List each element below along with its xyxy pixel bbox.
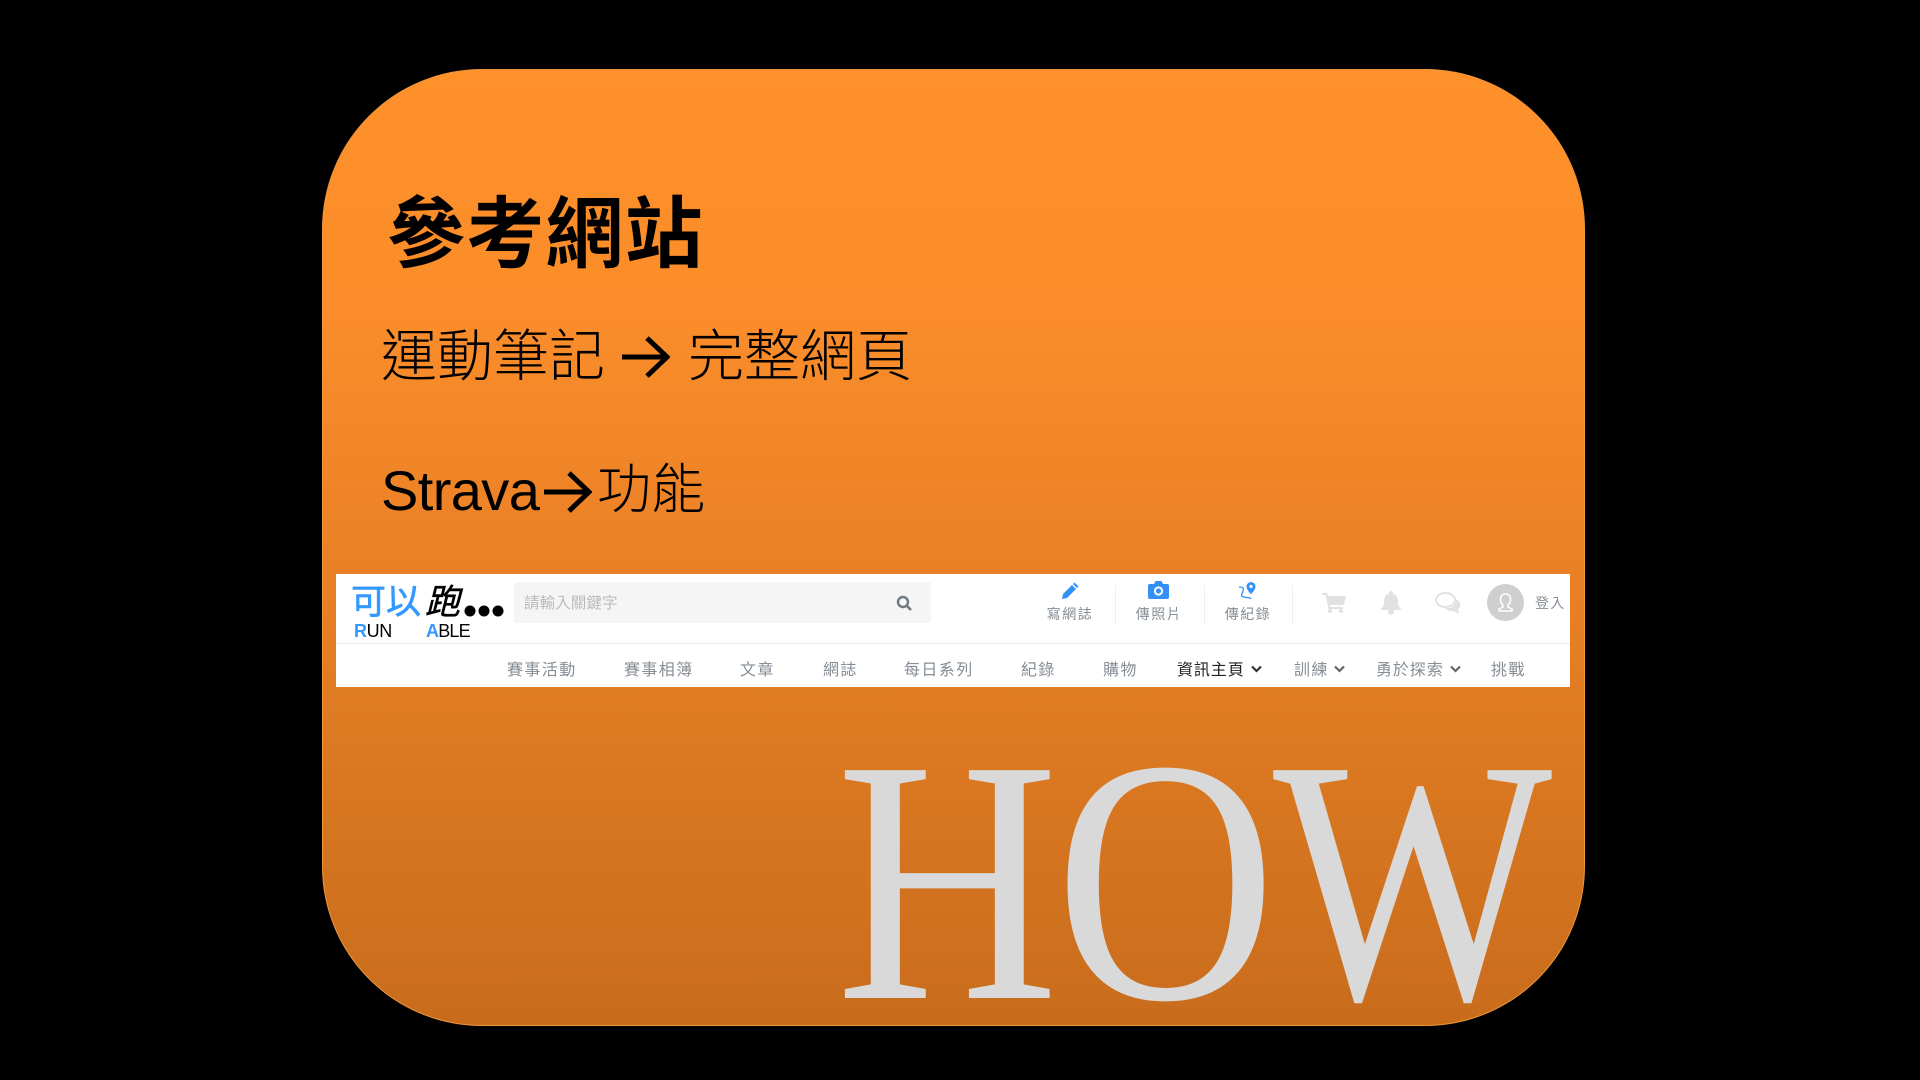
- navigation bar: 紀錄: [1021, 662, 1056, 679]
- logo: Runable: RUN: [354, 621, 392, 641]
- watermark: HOW: O: [1055, 688, 1276, 1073]
- icon: pencil: [1062, 582, 1078, 599]
- label: write log: 寫網誌: [1047, 606, 1093, 622]
- text: sports notes to full web page: 完整網頁: [688, 325, 912, 388]
- navigation bar: 訓練: [1294, 662, 1329, 679]
- divider: [1292, 585, 1293, 625]
- label: log in: 登入: [1535, 595, 1565, 611]
- divider: [1204, 585, 1205, 625]
- watermark: HOW: W: [1273, 688, 1555, 1073]
- icon: avatar: [1487, 584, 1524, 621]
- arrow: right: [622, 336, 670, 378]
- icon: bell: [1380, 591, 1402, 615]
- text: sports notes to full web page: 運動筆記: [381, 325, 605, 388]
- text: Strava to features: 功能: [597, 460, 705, 520]
- navigation bar: 資訊主頁: [1177, 662, 1245, 679]
- navigation bar: 每日系列: [904, 662, 974, 679]
- logo: Runable: 可以: [351, 583, 421, 622]
- navigation bar: 賽事相簿: [624, 662, 694, 679]
- label: upload photos: 傳照片: [1136, 606, 1182, 622]
- search box: [514, 582, 931, 623]
- logo: Runable: 跑: [425, 583, 460, 622]
- navigation bar: 挑戰: [1491, 662, 1526, 679]
- text: Strava to features: [381, 459, 705, 522]
- navigation bar: [507, 661, 1526, 679]
- search box: 請輸入關鍵字: [524, 595, 618, 612]
- panel: orange rounded card: [322, 69, 1585, 1026]
- icon: camera: [1148, 581, 1169, 599]
- arrow: right: [544, 471, 592, 513]
- text: Strava to features: Strava: [381, 459, 539, 522]
- navigation bar: 賽事活動: [507, 662, 577, 679]
- label: upload record: 傳紀錄: [1225, 606, 1271, 622]
- navigation bar: 勇於探索: [1376, 662, 1444, 679]
- logo: Runable: [351, 583, 504, 641]
- divider: [336, 643, 1570, 644]
- text: sports notes to full web page: [381, 325, 912, 388]
- navigation bar: 文章: [740, 662, 775, 679]
- icon: route pin: [1239, 582, 1256, 600]
- logo: Runable: ABLE: [426, 621, 470, 641]
- watermark: HOW: H: [836, 689, 1059, 1074]
- divider: [1115, 585, 1116, 625]
- icon: chat bubbles: [1435, 592, 1460, 614]
- icon: cart: [1322, 593, 1346, 613]
- navigation bar: 購物: [1103, 662, 1138, 679]
- title: 參考網站: [387, 190, 704, 278]
- website screenshot header: [336, 574, 1570, 687]
- navigation bar: 網誌: [823, 662, 858, 679]
